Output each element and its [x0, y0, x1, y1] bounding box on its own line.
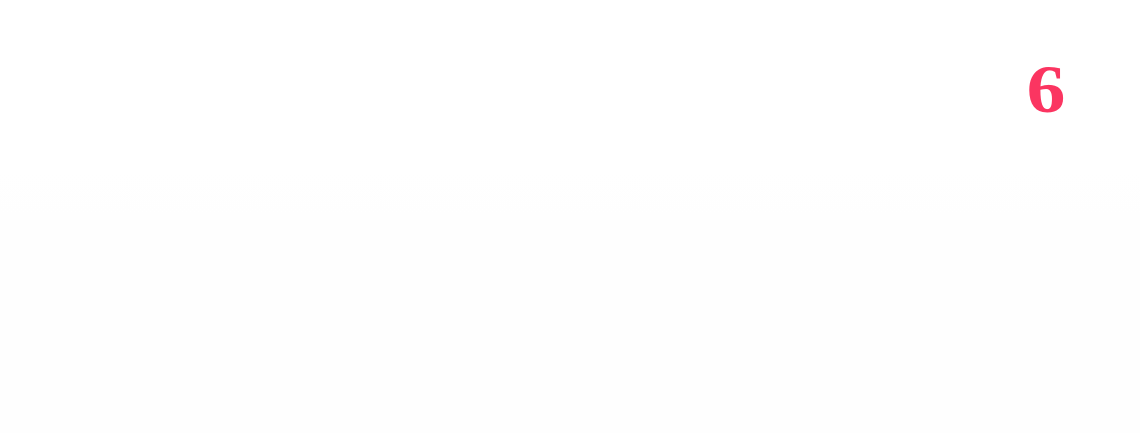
number: large red serif 6: 6 [1027, 51, 1065, 127]
